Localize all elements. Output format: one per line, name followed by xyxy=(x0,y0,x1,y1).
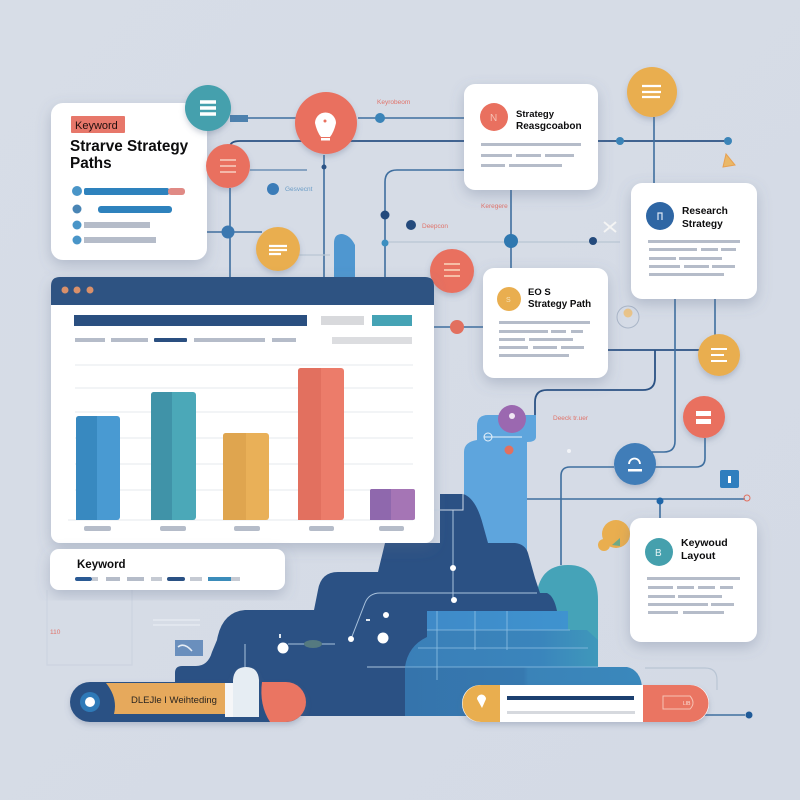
panel: keyword layout card: B xyxy=(655,548,662,559)
icon: yellow note circle right xyxy=(698,334,740,376)
panel: keyword strip xyxy=(50,549,285,590)
icon: purple pin xyxy=(484,405,526,454)
tag: keyword xyxy=(71,116,125,133)
panel: research strategy card: Research xyxy=(682,206,728,217)
light blue tower xyxy=(464,415,536,560)
panel: strategy card xyxy=(464,84,598,190)
panel: strategy paths card: Keyword xyxy=(75,120,118,132)
pill button xyxy=(663,696,693,709)
panel: bottom right pill xyxy=(462,685,709,722)
small caption labels: Keyrobeom xyxy=(377,99,410,106)
panel: strategy card: Strategy xyxy=(516,109,555,120)
small caption labels: 110 xyxy=(50,629,61,636)
panel: bottom right pill: LIB xyxy=(683,701,691,707)
icon: teal list circle xyxy=(185,85,231,131)
small caption labels: Deeck tr.uer xyxy=(553,415,589,422)
panel: strategy paths card xyxy=(51,103,207,260)
panel: research strategy card xyxy=(631,183,757,299)
panel: strategy card: Reasgcoabon xyxy=(516,121,582,132)
panel: keyword layout card xyxy=(630,518,757,642)
icon: yellow note circle xyxy=(256,227,300,271)
panel: bottom left pill xyxy=(70,667,306,722)
decorative mini icons xyxy=(604,154,750,501)
panel: keyword layout card: Layout xyxy=(681,550,716,562)
connector nodes xyxy=(222,113,752,718)
panel: seo strategy path card: EO S xyxy=(528,287,551,298)
small caption labels: Keregere xyxy=(481,203,508,210)
pill bulb icon xyxy=(477,694,486,708)
teal arch xyxy=(536,565,598,670)
panel: strategy card: N xyxy=(490,113,497,124)
panel: seo strategy path card xyxy=(483,268,608,378)
white capsule xyxy=(233,667,259,717)
small caption labels: Deepcon xyxy=(422,223,448,230)
icon: coral menu circle right xyxy=(430,249,474,293)
icon: blue phone circle xyxy=(614,443,656,485)
heading: Strarve Strategy xyxy=(70,138,189,155)
white circuit lines xyxy=(245,510,537,668)
blue stepped base xyxy=(427,611,568,630)
panel: seo strategy path card: S xyxy=(506,297,511,304)
small caption labels xyxy=(50,99,589,636)
window header xyxy=(51,277,434,305)
pill target icon xyxy=(80,692,100,712)
panel: keyword layout card: Keywoud xyxy=(681,537,728,549)
axis labels xyxy=(84,526,111,531)
list rows xyxy=(72,186,82,196)
small caption labels: Gesvecnt xyxy=(285,186,313,193)
icon: coral menu circle xyxy=(206,144,250,188)
bar chart xyxy=(76,368,415,520)
panel: dark blue landscape xyxy=(175,415,642,716)
panel: seo strategy path card: Strategy Path xyxy=(528,299,591,310)
panel: keyword strip: Keyword xyxy=(77,559,126,571)
connector lines xyxy=(47,117,745,715)
icon: small chart tile xyxy=(175,640,203,656)
panel: research strategy card: Strategy xyxy=(682,219,723,230)
toolbar xyxy=(74,315,307,326)
icon: coral lightbulb circle xyxy=(295,92,357,154)
grid lines xyxy=(68,365,413,520)
pill label: DLEJle I Weihteding xyxy=(131,695,217,706)
icon: coral bars circle xyxy=(683,396,725,438)
icon: yellow menu circle top xyxy=(627,67,677,117)
icon: yellow lightbulb xyxy=(598,520,630,551)
panel: browser window with bar chart xyxy=(51,277,434,543)
icon: blue tab shape xyxy=(334,234,355,277)
panel: strategy paths card: Paths xyxy=(70,155,112,172)
mountain silhouette xyxy=(175,494,557,716)
